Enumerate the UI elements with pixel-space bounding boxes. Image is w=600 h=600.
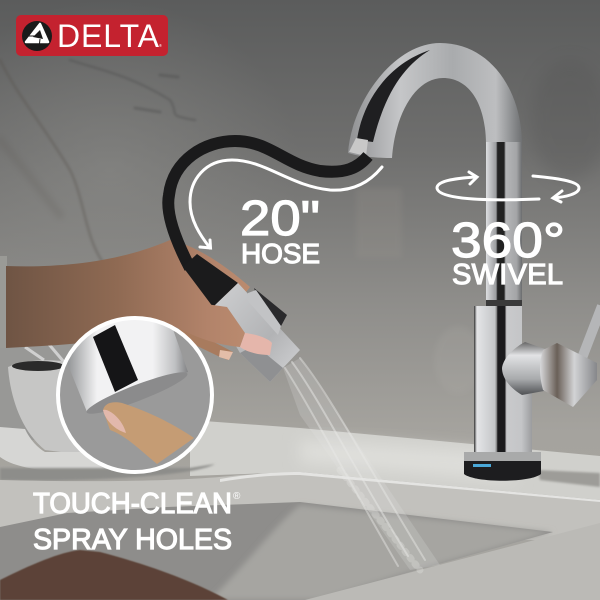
label: 360 swivel: SWIVEL: [452, 259, 563, 291]
hose connector: [183, 254, 238, 307]
spray button: [254, 288, 287, 328]
finger nail: [103, 410, 126, 433]
base ring: [464, 452, 541, 462]
wordmark: DELTA: [57, 18, 160, 54]
label: 20 inch hose: 20": [240, 192, 320, 246]
label: 360 swivel: [451, 214, 565, 291]
counter highlight: [300, 440, 520, 482]
label: touch-clean spray holes: [33, 488, 241, 556]
label: touch-clean spray holes: ®: [233, 491, 241, 502]
label: touch-clean spray holes: TOUCH-CLEAN: [33, 488, 232, 520]
logo: Delta: [16, 15, 168, 56]
arm and palm: [6, 240, 250, 348]
countertop, sink and foreground: [0, 420, 600, 600]
bright edge line: [220, 472, 600, 502]
vertical pipe: [486, 142, 522, 302]
button clip: [247, 290, 281, 335]
handle: [502, 342, 545, 395]
spray head: [213, 283, 300, 382]
label: 20 inch hose: HOSE: [241, 238, 320, 269]
label: 20 inch hose: [240, 192, 320, 269]
logo mark: [22, 21, 52, 51]
spray nozzle: [240, 345, 283, 382]
aerator reflection: [93, 325, 138, 392]
pull-down hose: [168, 141, 368, 268]
sleeve: [0, 256, 7, 348]
hand holding spray: [0, 141, 368, 382]
handle head: [540, 343, 597, 407]
arrow: swivel rotation: [437, 172, 579, 202]
spout dark reflection: [357, 50, 430, 142]
black base: [464, 461, 541, 481]
label: 360 swivel: 360°: [451, 214, 565, 268]
label: touch-clean spray holes: SPRAY HOLES: [33, 524, 232, 556]
sink interior: [0, 502, 553, 600]
second finger: [177, 327, 233, 360]
finger: [103, 402, 194, 464]
logo: Delta: ®: [159, 43, 162, 48]
cup and plate behind the hand: [0, 340, 110, 472]
index finger: [170, 300, 245, 347]
fingernail second: [219, 350, 233, 360]
touch light: [473, 464, 491, 467]
fingernail: [240, 333, 272, 355]
foreground hand: [0, 550, 228, 600]
counter wall shadow: [538, 470, 600, 487]
foreground counter: [305, 523, 600, 600]
spout: [348, 43, 522, 300]
water spray: [283, 358, 440, 570]
spray face: [86, 372, 188, 414]
lever: [582, 306, 600, 358]
shadow under plate: [0, 464, 215, 480]
arrow: hose length: [190, 160, 382, 248]
counter top surface: [190, 420, 600, 500]
aerator: [66, 315, 188, 412]
callout: touch-clean close-up: [58, 315, 212, 472]
faucet: [348, 43, 600, 481]
counter front edge: [0, 472, 600, 540]
spout tip highlight: [349, 138, 368, 156]
body column: [474, 306, 532, 456]
